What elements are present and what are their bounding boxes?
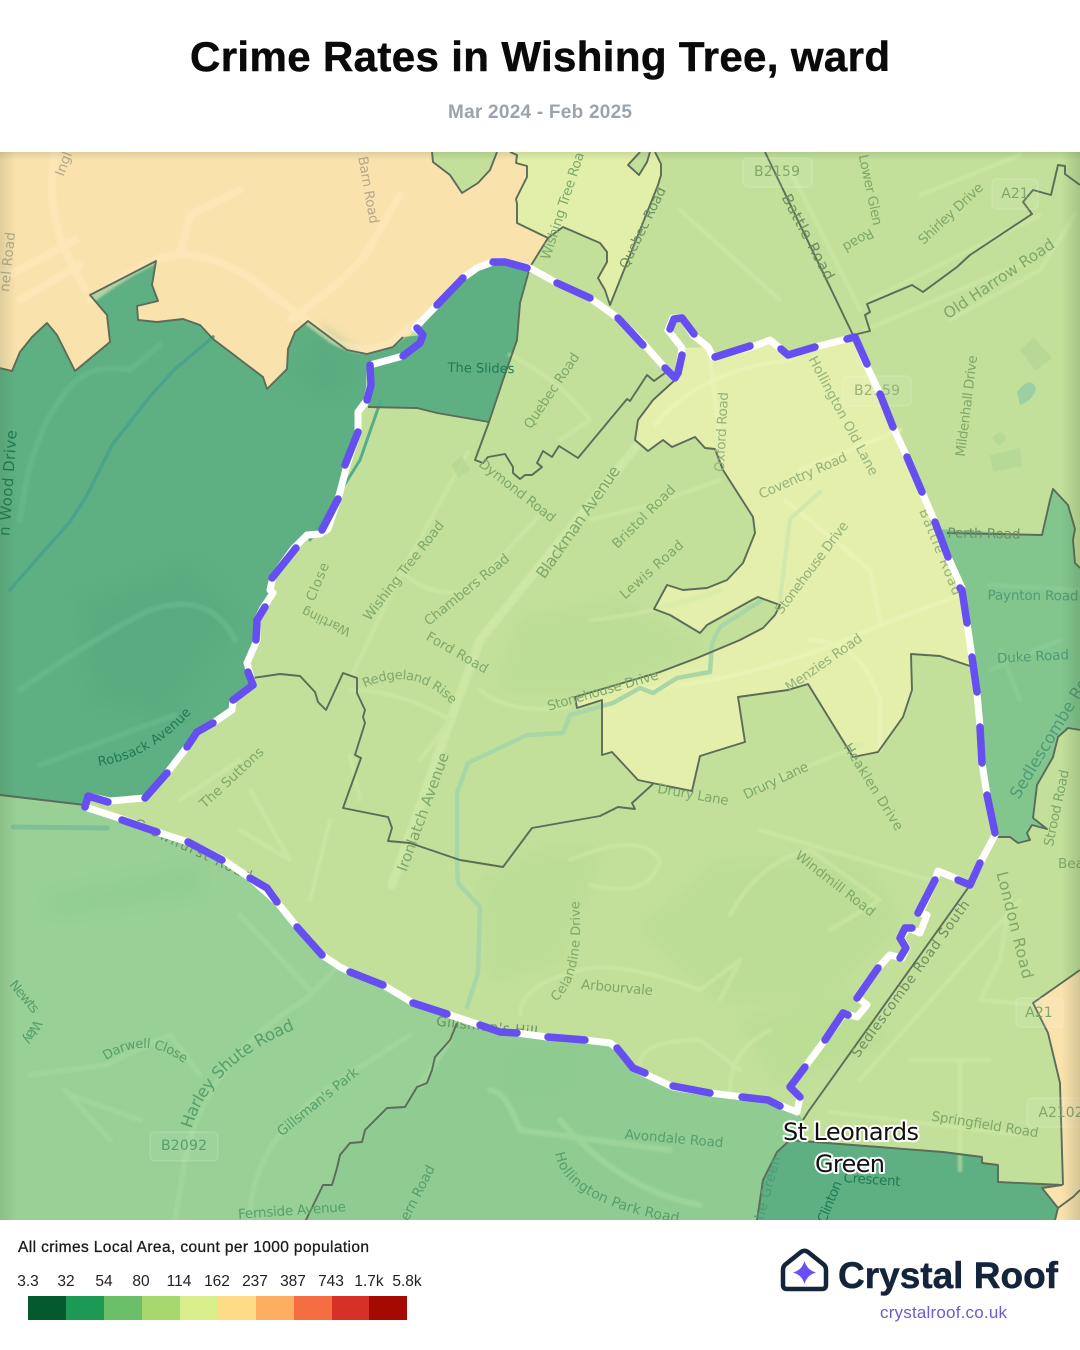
legend scale values: 32	[57, 1273, 75, 1290]
legend scale values: 1.7k	[354, 1273, 384, 1290]
labels on light green: Bristol Road	[609, 482, 679, 552]
labels on south-west green: Hollington Park Road	[555, 1152, 679, 1220]
shield: A21 north: A21	[1001, 186, 1029, 202]
place label: St Leonards Green: Green	[815, 1150, 885, 1178]
area: peach south-east	[1033, 970, 1080, 1220]
legend scale values: 743	[318, 1273, 344, 1290]
legend	[17, 1239, 422, 1320]
map base area: green band	[90, 152, 1080, 1184]
labels on light green	[198, 154, 1080, 1138]
labels on light green: Blackman Avenue	[532, 462, 624, 582]
mid green roads	[30, 915, 700, 1220]
darker labels over boundary lines: Battle Road	[778, 191, 838, 283]
stream: north-west by ward edge	[310, 400, 381, 540]
labels on light green: Strood Road	[1041, 768, 1073, 848]
shield: B2159 centre	[843, 376, 911, 406]
darker labels over boundary lines: Perth Road	[947, 525, 1021, 543]
labels on light green: Ironlatch Avenue	[393, 750, 453, 874]
ward boundary: white base line	[85, 262, 995, 1112]
east mid green roads	[1006, 588, 1074, 662]
labels on light green: Dymond Road	[475, 456, 559, 526]
western dark area roads	[78, 602, 234, 721]
labels on light green: Lewis Road	[617, 537, 687, 603]
area: mid green east	[937, 489, 1080, 843]
place label: St Leonards Green	[783, 1118, 919, 1178]
labels on mid green: he Green	[752, 1155, 784, 1221]
logo: Crystal Roof	[783, 1251, 1059, 1322]
shield: A21 north	[992, 179, 1038, 209]
boundary: south areas	[757, 1140, 1062, 1220]
wordmark: Crystal Roof	[838, 1255, 1059, 1296]
labels on peach area: Barn Road	[354, 155, 382, 225]
legend title: All crimes Local Area, count per 1000 population	[18, 1239, 369, 1256]
labels on pale yellow: Menzies Road	[783, 631, 865, 695]
labels on pale yellow: Hollington Old Lane	[805, 354, 881, 478]
labels on pale yellow: Oxford Road	[712, 392, 732, 472]
labels on pale yellow	[712, 354, 965, 695]
shield: B2159 north	[743, 158, 812, 187]
street labels	[0, 152, 1080, 1220]
labels on light green: The Suttons	[196, 744, 267, 812]
darker labels over boundary lines: Gillsman's Hill	[435, 1014, 539, 1040]
ward main road: Blackman Avenue	[392, 447, 636, 885]
area: light yellow centre-east of ward	[575, 337, 970, 791]
darker labels over boundary lines: Crowhurst Road	[132, 816, 254, 884]
roads	[0, 152, 1080, 1220]
shield: A21 south: A21	[1025, 1005, 1053, 1021]
website url: crystalroof.co.uk	[880, 1303, 1008, 1322]
area: small green pocket north	[630, 152, 649, 174]
labels on dark green: Clinton	[814, 1179, 846, 1225]
darker labels over boundary lines: Sedlescombe Road South	[849, 897, 973, 1061]
labels on light green: Lower Glen	[855, 153, 885, 227]
labels on dark green: Robsack Avenue	[98, 710, 190, 766]
labels on dark green: The Slides	[446, 361, 515, 377]
labels on light green: Shirley Drive	[915, 180, 987, 248]
shield: B2092: B2092	[161, 1138, 207, 1154]
area: peach north-west	[0, 152, 548, 400]
area: dark green west	[0, 261, 423, 807]
peach area roads	[0, 152, 420, 349]
labels on peach area	[0, 150, 382, 293]
labels on light green: Arbourvale	[580, 977, 654, 999]
labels on south-west green: Avondale Road	[624, 1127, 724, 1151]
legend scale values	[17, 1273, 422, 1290]
labels on peach area: Ingl	[52, 150, 76, 178]
labels on light green: Wartling	[299, 604, 353, 640]
shield: B2159 north: B2159	[754, 164, 800, 180]
boundary: north peach edge	[0, 261, 403, 389]
labels on light green: Celandine Drive	[551, 902, 580, 1000]
labels on light green: Windmill Road	[792, 848, 878, 920]
place label: St Leonards Green: St Leonards	[783, 1118, 919, 1146]
area: dark green south	[757, 1140, 1062, 1220]
legend colour bar	[28, 1296, 407, 1320]
labels on south-west green: ern Road	[397, 1163, 439, 1223]
yellow area roads	[640, 360, 960, 750]
subtitle: date range: Mar 2024 - Feb 2025	[448, 102, 632, 123]
labels on light green: Heaklen Drive	[840, 740, 906, 834]
stream: through ward	[457, 600, 762, 1007]
labels on light green: Stonehouse Drive	[546, 667, 660, 715]
area: dark green The Slides	[368, 262, 530, 422]
boundary: west ward sub-areas	[253, 673, 653, 867]
boundary: Quebec Road block	[475, 373, 665, 479]
labels on light green: Close	[303, 560, 333, 604]
labels on light green: Quebec Road	[521, 350, 583, 432]
labels on light green: Wishing Tree Road	[360, 518, 448, 624]
labels on light green: Redgeland Rise	[362, 670, 456, 704]
labels on light green: Drury Lane	[741, 759, 811, 803]
stream: west woods	[10, 337, 213, 590]
legend scale values: 162	[204, 1273, 230, 1290]
boundary: light yellow centre-east	[575, 380, 970, 791]
legend scale values: 3.3	[17, 1273, 39, 1290]
labels on light green: London Road	[992, 869, 1038, 981]
shield: A2102	[1027, 1098, 1080, 1127]
ponds and buildings	[451, 337, 1052, 478]
boundary: stream south	[305, 1023, 457, 1222]
area: mid green south-west	[0, 795, 803, 1220]
labels on light green: Road	[840, 225, 876, 255]
labels on south-west green: Newts	[6, 977, 42, 1017]
labels on south-west green	[10, 980, 722, 1220]
labels on south-west green: Way	[19, 1017, 45, 1047]
ward residential roads	[401, 156, 1072, 1173]
labels on mid green	[752, 588, 1080, 1221]
boundary: mid green east	[947, 489, 1080, 843]
labels on south-west green: Darwell Close	[102, 1038, 186, 1062]
boundary: The Slides	[368, 267, 530, 422]
labels on light green: Old Harrow Road	[940, 235, 1058, 323]
boundary: Sedlescombe Road South	[803, 888, 968, 1120]
area: mid green south	[799, 1115, 803, 1121]
area: light yellow north	[510, 152, 661, 305]
labels on mid green: Duke Road	[997, 647, 1069, 667]
labels on pale yellow: Coventry Road	[756, 449, 850, 503]
labels on pale yellow: Stonehouse Drive	[772, 518, 852, 618]
ward boundary: purple dashes	[85, 262, 995, 1106]
boundary: Battle Road and north-east	[765, 152, 1080, 335]
terrain shading	[285, 324, 356, 370]
labels on pale yellow: Battle Road	[915, 506, 965, 598]
title: Crime Rates in Wishing Tree, ward	[190, 33, 890, 80]
darker labels over boundary lines	[132, 184, 1021, 1061]
labels on south-west green: Fernside Avenue	[238, 1199, 346, 1223]
labels on south-west green: Gillsman's Park	[274, 1064, 362, 1140]
darker labels over boundary lines: Quebec Road	[616, 184, 670, 272]
stream: south-west	[13, 827, 107, 828]
labels on light green: Drury Lane	[656, 781, 730, 809]
labels on light green: Springfield Road	[930, 1109, 1040, 1141]
stream: north of Stonehouse Drive	[780, 492, 820, 600]
map edge vignette	[0, 152, 1080, 1220]
legend scale values: 114	[167, 1273, 192, 1290]
legend scale values: 387	[280, 1273, 306, 1290]
legend scale values: 5.8k	[392, 1273, 422, 1290]
shield: B2159 centre: B2159	[854, 383, 900, 399]
labels on dark green	[0, 362, 900, 1220]
legend scale values: 80	[132, 1273, 150, 1290]
labels on light green: Chambers Road	[421, 551, 513, 629]
labels on light green: Wishing Tree Roa	[538, 150, 588, 262]
internal area boundaries	[0, 152, 1080, 1222]
labels on light green: Mildenhall Drive	[953, 354, 981, 458]
labels on south-west green: Harley Shute Road	[180, 1018, 294, 1128]
shield: A21 south	[1016, 998, 1063, 1027]
labels on dark green: Crescent	[843, 1170, 901, 1190]
road shields	[150, 158, 1080, 1161]
streams	[10, 337, 820, 1007]
icon: house with sparkle	[783, 1251, 826, 1289]
labels on mid green: Paynton Road	[987, 588, 1079, 604]
legend scale values: 54	[95, 1273, 113, 1290]
labels on light green: Ford Road	[423, 629, 491, 677]
shield: B2092	[150, 1132, 218, 1161]
legend scale values: 237	[242, 1273, 268, 1290]
